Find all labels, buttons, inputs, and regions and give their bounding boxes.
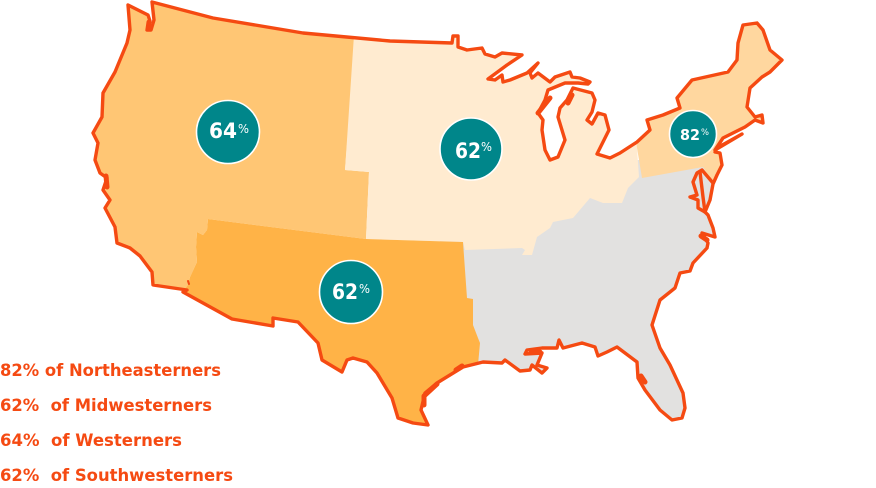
region: northeast (636, 25, 780, 180)
legend: west: 64% of Westerners (0, 431, 182, 451)
badge: midwest 62% (440, 118, 502, 180)
badge: northeast 82%: % (701, 128, 709, 138)
legend (0, 361, 233, 486)
badge: northeast 82% (670, 110, 716, 158)
map of the United States (80, 0, 800, 440)
legend: midwest: 62% of Midwesterners (0, 396, 212, 416)
badge: west 64%: % (238, 122, 249, 136)
badge: southwest 62% (320, 260, 382, 324)
region: west (95, 4, 369, 288)
badge: northeast 82%: 82 (680, 126, 700, 144)
badge: midwest 62%: 62 (455, 139, 481, 163)
badge: west 64% (196, 100, 260, 164)
region: midwest (345, 20, 640, 255)
region: southwest (186, 219, 480, 423)
badge: southwest 62%: 62 (332, 280, 358, 304)
region: southeast (463, 160, 713, 418)
badge: southwest 62%: % (359, 282, 370, 296)
map outline (93, 2, 782, 425)
legend: southwest: 62% of Southwesterners (0, 466, 233, 486)
badge: west 64%: 64 (209, 119, 237, 143)
badge: midwest 62%: % (481, 140, 492, 154)
legend: northeast: 82% of Northeasterners (0, 361, 221, 381)
